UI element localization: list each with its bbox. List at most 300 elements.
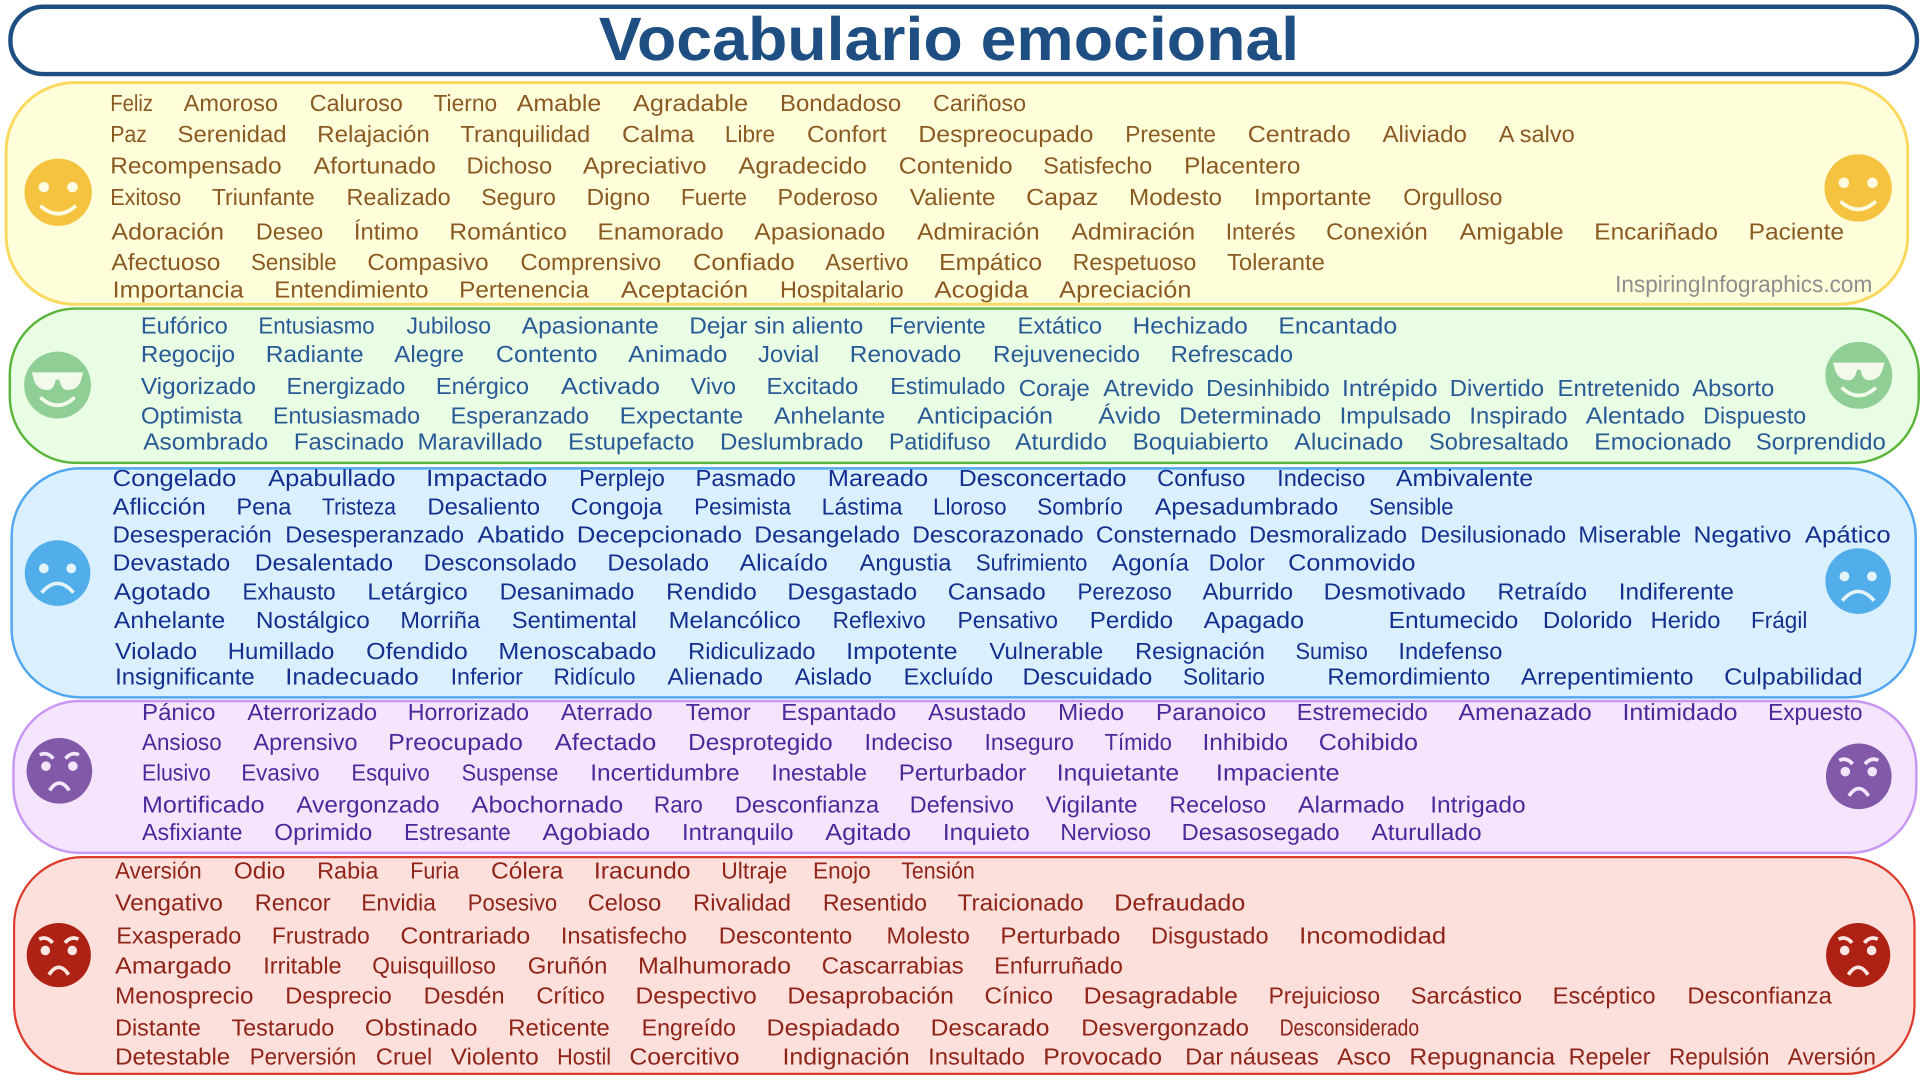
- word row 4: Vigilante: [1046, 793, 1138, 818]
- word row 1: Hechizado: [1133, 314, 1248, 339]
- word row 4: Optimista: [141, 404, 243, 429]
- word row 5: Indiferente: [1619, 580, 1734, 606]
- word row 6: [114, 608, 1807, 634]
- word row 7: Perversión: [250, 1045, 356, 1071]
- word row 3: Negativo: [1693, 523, 1791, 548]
- word row 6: Desvergonzado: [1081, 1016, 1249, 1041]
- icon: left sad face: [25, 540, 90, 606]
- word row 2: Cohibido: [1319, 730, 1418, 756]
- panel: red anger emotions: [14, 857, 1914, 1074]
- word row 2: Envidia: [361, 891, 436, 917]
- word row 5: Estresante: [404, 820, 511, 846]
- word row 3: Frustrado: [272, 924, 370, 949]
- word row 6: Pensativo: [958, 608, 1058, 634]
- word row 7: Entendimiento: [274, 278, 429, 304]
- word row 7: Humillado: [228, 639, 334, 665]
- word row 2: Sombrío: [1037, 495, 1123, 520]
- word row 5: Perezoso: [1078, 580, 1172, 606]
- word row 3: Evasivo: [241, 761, 320, 786]
- word row 4: Alentado: [1586, 404, 1685, 429]
- word row 1: Apabullado: [268, 466, 396, 492]
- word row 5: [142, 820, 1482, 846]
- word row 4: Alicaído: [740, 551, 828, 577]
- word row 5: Cínico: [984, 984, 1053, 1010]
- icon: left angry face: [27, 923, 91, 987]
- word row 5: Romántico: [449, 220, 567, 245]
- word row 1: Bondadoso: [780, 91, 901, 117]
- word row 6: Testarudo: [231, 1016, 334, 1041]
- word row 5: Encariñado: [1594, 220, 1718, 245]
- word row 2: Regocijo: [141, 342, 235, 368]
- word row 7: Cruel: [376, 1045, 432, 1071]
- word row 2: Preocupado: [388, 730, 523, 756]
- word row 2: [141, 342, 1293, 368]
- word row 3: Desmoralizado: [1249, 523, 1407, 548]
- word row 3: Coraje: [1019, 376, 1090, 402]
- word row 4: Dispuesto: [1703, 404, 1806, 429]
- word row 1: Entusiasmo: [258, 314, 375, 339]
- word row 5: Desasosegado: [1182, 820, 1340, 846]
- word row 2: Jovial: [758, 342, 819, 368]
- word row 7: Coercitivo: [629, 1045, 740, 1071]
- word row 5: Desanimado: [500, 580, 634, 606]
- word row 1: Expuesto: [1768, 700, 1862, 726]
- word row 7: [115, 639, 1502, 665]
- word row 4: Triunfante: [212, 186, 315, 211]
- word row 3: Activado: [561, 374, 660, 400]
- word row 4: [110, 186, 1502, 211]
- word row 1: Aversión: [115, 859, 202, 885]
- word row 2: Congoja: [571, 495, 663, 520]
- word row 5: [114, 580, 1734, 606]
- word row 7: Indignación: [782, 1045, 910, 1071]
- panel: blue sad emotions: [12, 466, 1916, 697]
- word row 1: Congelado: [113, 466, 236, 492]
- word row 4: Ávido: [1098, 402, 1161, 429]
- word row 3: Inquietante: [1057, 761, 1179, 786]
- word row 1: Pánico: [142, 700, 216, 726]
- word row 1: Amenazado: [1458, 700, 1592, 726]
- word row 7: Violento: [451, 1045, 539, 1071]
- word row 4: Determinado: [1179, 404, 1321, 429]
- word row 5: Patidifuso: [889, 430, 991, 456]
- word row 5: Sarcástico: [1411, 984, 1522, 1010]
- word row 2: Libre: [725, 122, 775, 148]
- icon: right sad face: [1825, 548, 1891, 614]
- word row 5: Intranquilo: [682, 820, 793, 846]
- word row 2: Presente: [1125, 122, 1216, 148]
- word row 4: [113, 551, 1416, 577]
- word row 1: Tierno: [433, 91, 497, 117]
- word row 4: Avergonzado: [296, 793, 440, 818]
- panel: purple fear emotions: [13, 700, 1916, 853]
- word row 5: Deseo: [256, 220, 323, 245]
- word row 4: Entusiasmado: [273, 404, 420, 429]
- word row 4: Expectante: [620, 404, 743, 429]
- word row 4: Quisquilloso: [372, 954, 496, 980]
- word row 5: Desdén: [424, 984, 504, 1010]
- word row 3: Exasperado: [116, 924, 241, 949]
- word row 6: Desconsiderado: [1280, 1016, 1419, 1041]
- word row 1: Impactado: [426, 466, 547, 492]
- word row 2: Inseguro: [984, 730, 1074, 756]
- word row 2: Contento: [496, 342, 598, 368]
- word row 3: Perturbador: [899, 761, 1027, 786]
- word row 4: Abochornado: [471, 793, 623, 818]
- word row 5: Letárgico: [367, 580, 468, 606]
- word row 1: Confuso: [1157, 466, 1245, 492]
- word row 5: Agotado: [114, 580, 211, 606]
- word row 1: Pasmado: [696, 466, 796, 492]
- word row 4: Digno: [587, 186, 650, 211]
- icon: left sunglasses face: [24, 352, 91, 419]
- word row 3: Recompensado: [110, 154, 282, 180]
- word row 1: Enojo: [813, 859, 871, 885]
- word row 6: Engreído: [642, 1016, 736, 1041]
- word row 4: Irritable: [263, 954, 342, 980]
- word row 1: Agradable: [633, 91, 748, 117]
- word row 4: Anhelante: [774, 404, 885, 429]
- word row 6: Despiadado: [767, 1016, 900, 1041]
- word row 4: Realizado: [347, 186, 451, 211]
- word row 1: [142, 700, 1862, 726]
- word row 6: Afectuoso: [111, 251, 220, 276]
- word row 7: Aversión: [1788, 1045, 1876, 1071]
- word row 3: Atrevido: [1103, 376, 1194, 402]
- word row 1: Encantado: [1278, 314, 1397, 339]
- word row 6: Dolorido: [1543, 608, 1632, 634]
- word row 3: Desesperanzado: [285, 523, 464, 548]
- word row 2: Traicionado: [958, 891, 1084, 917]
- word row 6: Anhelante: [114, 608, 225, 634]
- word row 8: Excluído: [904, 665, 993, 690]
- word row 5: Interés: [1226, 220, 1296, 245]
- word row 7: Repulsión: [1669, 1045, 1769, 1071]
- word row 4: Raro: [654, 793, 703, 818]
- word row 2: Pesimista: [694, 495, 792, 520]
- word row 1: Ambivalente: [1396, 466, 1533, 492]
- word row 1: Temor: [686, 700, 751, 726]
- word row 3: [110, 154, 1300, 180]
- word row 3: Decepcionado: [577, 523, 742, 548]
- word row 3: Afortunado: [313, 154, 436, 180]
- word row 1: Jubiloso: [407, 314, 491, 339]
- word row 2: Indeciso: [864, 730, 953, 756]
- word row 5: Alucinado: [1294, 430, 1403, 456]
- word row 3: Contrariado: [400, 924, 530, 949]
- panel: green excited emotions: [10, 309, 1919, 463]
- word row 1: Espantado: [781, 700, 896, 726]
- word row 3: Placentero: [1184, 154, 1300, 180]
- word row 2: Ansioso: [142, 730, 222, 756]
- word row 3: Enérgico: [436, 374, 529, 400]
- word row 3: Absorto: [1692, 376, 1774, 402]
- word row 7: Indefenso: [1398, 639, 1502, 665]
- word row 5: Deslumbrado: [720, 430, 863, 456]
- word row 7: Menoscabado: [498, 639, 656, 665]
- word row 7: Pertenencia: [459, 278, 590, 304]
- word row 1: Miedo: [1058, 700, 1124, 726]
- word row 7: Hospitalario: [780, 278, 904, 304]
- word row 8: Inadecuado: [285, 665, 419, 690]
- word row 2: Alegre: [394, 342, 464, 368]
- word row 2: Posesivo: [468, 891, 557, 917]
- word row 5: Fascinado: [294, 430, 404, 456]
- word row 4: Valiente: [910, 186, 996, 211]
- word row 5: [115, 984, 1832, 1010]
- word row 1: Cólera: [491, 859, 564, 885]
- word row 3: Entretenido: [1558, 376, 1680, 402]
- word row 2: Radiante: [266, 342, 364, 368]
- word row 1: Extático: [1018, 314, 1102, 339]
- word row 5: Admiración: [1071, 220, 1195, 245]
- word row 1: Iracundo: [594, 859, 691, 885]
- word row 5: Paciente: [1749, 220, 1844, 245]
- word row 4: Seguro: [481, 186, 556, 211]
- word row 6: [111, 251, 1325, 276]
- word row 4: [142, 793, 1526, 818]
- word row 6: Perdido: [1090, 608, 1173, 634]
- word row 3: Apreciativo: [583, 154, 707, 180]
- word row 7: Ridiculizado: [688, 639, 816, 665]
- word row 5: Cansado: [948, 580, 1046, 606]
- word row 3: Descontento: [719, 924, 852, 949]
- word row 4: Angustia: [860, 551, 952, 577]
- word row 7: [113, 278, 1191, 304]
- word row 3: Intrépido: [1342, 376, 1438, 402]
- title: Vocabulario emocional: [599, 5, 1299, 73]
- word row 5: Desagradable: [1084, 984, 1238, 1010]
- word row 7: Vulnerable: [989, 639, 1103, 665]
- word row 5: Rendido: [666, 580, 757, 606]
- word row 5: Exhausto: [242, 580, 336, 606]
- word row 2: Aflicción: [113, 495, 206, 520]
- word row 5: Nervioso: [1060, 820, 1151, 846]
- word row 3: Inestable: [771, 761, 867, 786]
- word row 4: Conmovido: [1288, 551, 1416, 577]
- word row 8: Arrepentimiento: [1521, 665, 1693, 690]
- word row 7: Resignación: [1135, 639, 1265, 665]
- word row 4: Desconsolado: [424, 551, 577, 577]
- word row 7: Provocado: [1043, 1045, 1162, 1071]
- word row 7: Dar náuseas: [1185, 1045, 1319, 1071]
- word row 3: Molesto: [887, 924, 970, 949]
- word row 3: Suspense: [462, 761, 558, 786]
- word row 4: Poderoso: [778, 186, 878, 211]
- word row 2: Despreocupado: [918, 122, 1093, 148]
- word row 8: Descuidado: [1022, 665, 1152, 690]
- word row 4: Alarmado: [1298, 793, 1404, 818]
- word row 2: Resentido: [823, 891, 927, 917]
- word row 6: Entumecido: [1389, 608, 1518, 634]
- word row 7: [115, 1045, 1876, 1071]
- word row 3: Incertidumbre: [590, 761, 740, 786]
- word row 2: [113, 495, 1454, 520]
- word row 7: Impotente: [846, 639, 958, 665]
- word row 1: Tensión: [901, 859, 975, 885]
- word row 5: Desgastado: [787, 580, 917, 606]
- word row 1: [113, 466, 1533, 492]
- word row 3: Desangelado: [754, 523, 900, 548]
- word row 2: Aprensivo: [253, 730, 358, 756]
- word row 3: [141, 374, 1774, 402]
- word row 5: Escéptico: [1553, 984, 1656, 1010]
- word row 6: Asertivo: [825, 251, 909, 276]
- word row 5: Aturullado: [1371, 820, 1482, 846]
- word row 5: Aturdido: [1015, 430, 1107, 456]
- word row 3: Esquivo: [351, 761, 430, 786]
- word row 1: Caluroso: [310, 91, 403, 117]
- word row 3: Energizado: [287, 374, 405, 400]
- word row 8: Inferior: [451, 665, 524, 690]
- word row 2: Defraudado: [1114, 891, 1245, 917]
- word row 1: Rabia: [317, 859, 379, 885]
- word row 1: Amoroso: [184, 91, 278, 117]
- word row 4: Enfurruñado: [994, 954, 1123, 980]
- word row 6: Distante: [115, 1016, 201, 1041]
- word row 3: [142, 761, 1340, 786]
- word row 3: Vivo: [691, 374, 736, 400]
- word row 2: Serenidad: [178, 122, 287, 148]
- word row 7: Violado: [115, 639, 197, 665]
- word row 1: Odio: [234, 859, 285, 885]
- word row 5: Sobresaltado: [1429, 430, 1569, 456]
- word row 4: Dolor: [1209, 551, 1266, 577]
- word row 3: Satisfecho: [1043, 154, 1152, 180]
- word row 7: Apreciación: [1059, 278, 1191, 304]
- word row 5: Íntimo: [354, 218, 419, 245]
- word row 1: Paranoico: [1156, 700, 1266, 726]
- word row 5: Desaprobación: [787, 984, 954, 1010]
- word row 3: Desesperación: [113, 523, 272, 548]
- word row 5: Apasionado: [754, 220, 885, 245]
- word row 5: Conexión: [1326, 220, 1428, 245]
- word row 6: Tolerante: [1227, 251, 1325, 276]
- word row 2: Lloroso: [933, 495, 1007, 520]
- word row 4: Intrigado: [1430, 793, 1526, 818]
- word row 1: Asustado: [928, 700, 1026, 726]
- word row 5: Oprimido: [274, 820, 372, 846]
- word row 5: Emocionado: [1594, 430, 1731, 456]
- word row 3: Consternado: [1096, 523, 1237, 548]
- word row 2: Calma: [622, 122, 695, 148]
- word row 5: Agitado: [825, 820, 911, 846]
- word row 1: Cariñoso: [933, 91, 1026, 117]
- word row 5: Desmotivado: [1324, 580, 1466, 606]
- word row 2: A salvo: [1499, 122, 1575, 148]
- word row 5: Prejuicioso: [1269, 984, 1380, 1010]
- word row 5: Despectivo: [636, 984, 757, 1010]
- word row 5: Desprecio: [285, 984, 392, 1010]
- word row 2: Desaliento: [427, 495, 540, 520]
- word row 3: Abatido: [478, 523, 564, 548]
- word row 2: Refrescado: [1171, 342, 1293, 368]
- word row 5: Aburrido: [1202, 580, 1293, 606]
- word row 5: [111, 218, 1844, 245]
- word row 1: Ultraje: [721, 859, 787, 885]
- word row 3: Impaciente: [1216, 761, 1340, 786]
- word row 8: Solitario: [1183, 665, 1265, 690]
- word row 4: Agonía: [1112, 551, 1190, 577]
- word row 1: Horrorizado: [408, 700, 529, 726]
- word row 1: Eufórico: [141, 314, 228, 339]
- word row 7: Repeler: [1569, 1045, 1651, 1071]
- word row 2: Confort: [807, 122, 887, 148]
- word row 2: [115, 891, 1245, 917]
- word row 3: [113, 523, 1891, 548]
- word row 7: Detestable: [115, 1045, 230, 1071]
- word row 6: Reticente: [508, 1016, 610, 1041]
- word row 4: [115, 954, 1123, 980]
- word row 1: [115, 859, 975, 885]
- word row 3: Elusivo: [142, 761, 211, 786]
- word row 5: Admiración: [917, 220, 1040, 245]
- word row 7: Acogida: [934, 278, 1029, 304]
- icon: left smiley: [24, 159, 92, 226]
- word row 2: Rencor: [255, 891, 331, 917]
- word row 3: Apático: [1805, 523, 1891, 548]
- watermark: InspiringInfographics.com: [1615, 272, 1872, 298]
- word row 4: Exitoso: [110, 186, 181, 211]
- word row 1: [141, 314, 1397, 339]
- panel: yellow happy emotions: [6, 83, 1908, 304]
- word row 5: Asfixiante: [142, 820, 242, 846]
- word row 6: Apagado: [1204, 608, 1304, 634]
- word row 3: Incomodidad: [1299, 924, 1446, 949]
- word row 7: Ofendido: [366, 639, 468, 665]
- icon: right smiley: [1824, 154, 1892, 222]
- word row 6: Morriña: [400, 608, 481, 634]
- word row 6: Sensible: [251, 251, 337, 276]
- word row 5: Maravillado: [418, 430, 542, 456]
- word row 5: Menosprecio: [115, 984, 253, 1010]
- word row 1: Mareado: [828, 466, 928, 492]
- word row 7: Importancia: [113, 278, 244, 304]
- word row 7: Asco: [1337, 1045, 1391, 1071]
- word row 6: Reflexivo: [833, 608, 926, 634]
- word row 3: [116, 924, 1446, 949]
- word row 2: Rivalidad: [693, 891, 791, 917]
- word row 3: Desinhibido: [1206, 376, 1330, 402]
- word row 4: Devastado: [113, 551, 230, 577]
- word row 2: [142, 730, 1418, 756]
- icon: left worried face: [27, 738, 92, 804]
- word row 6: [115, 1016, 1419, 1041]
- word row 3: Agradecido: [738, 154, 867, 180]
- word row 1: Aterrado: [561, 700, 653, 726]
- word row 2: Vengativo: [115, 891, 223, 917]
- word row 8: Alienado: [667, 665, 763, 690]
- word row 8: Culpabilidad: [1724, 665, 1862, 690]
- word row 3: Divertido: [1450, 376, 1544, 402]
- word row 3: Desilusionado: [1420, 523, 1566, 548]
- word row 4: Orgulloso: [1403, 186, 1502, 211]
- word row 8: [115, 665, 1862, 690]
- word row 5: Amigable: [1460, 220, 1564, 245]
- word row 1: Ferviente: [889, 314, 986, 339]
- word row 4: Sufrimiento: [976, 551, 1087, 577]
- word row 6: Comprensivo: [520, 251, 661, 276]
- word row 5: Sorprendido: [1756, 430, 1886, 456]
- word row 6: Sentimental: [512, 608, 637, 634]
- word row 2: Renovado: [850, 342, 961, 368]
- word row 7: Repugnancia: [1409, 1045, 1556, 1071]
- word row 7: Insultado: [928, 1045, 1025, 1071]
- word row 3: Estimulado: [890, 374, 1005, 400]
- word row 4: Capaz: [1026, 186, 1098, 211]
- word row 4: Mortificado: [142, 793, 264, 818]
- word row 7: Aceptación: [621, 278, 748, 304]
